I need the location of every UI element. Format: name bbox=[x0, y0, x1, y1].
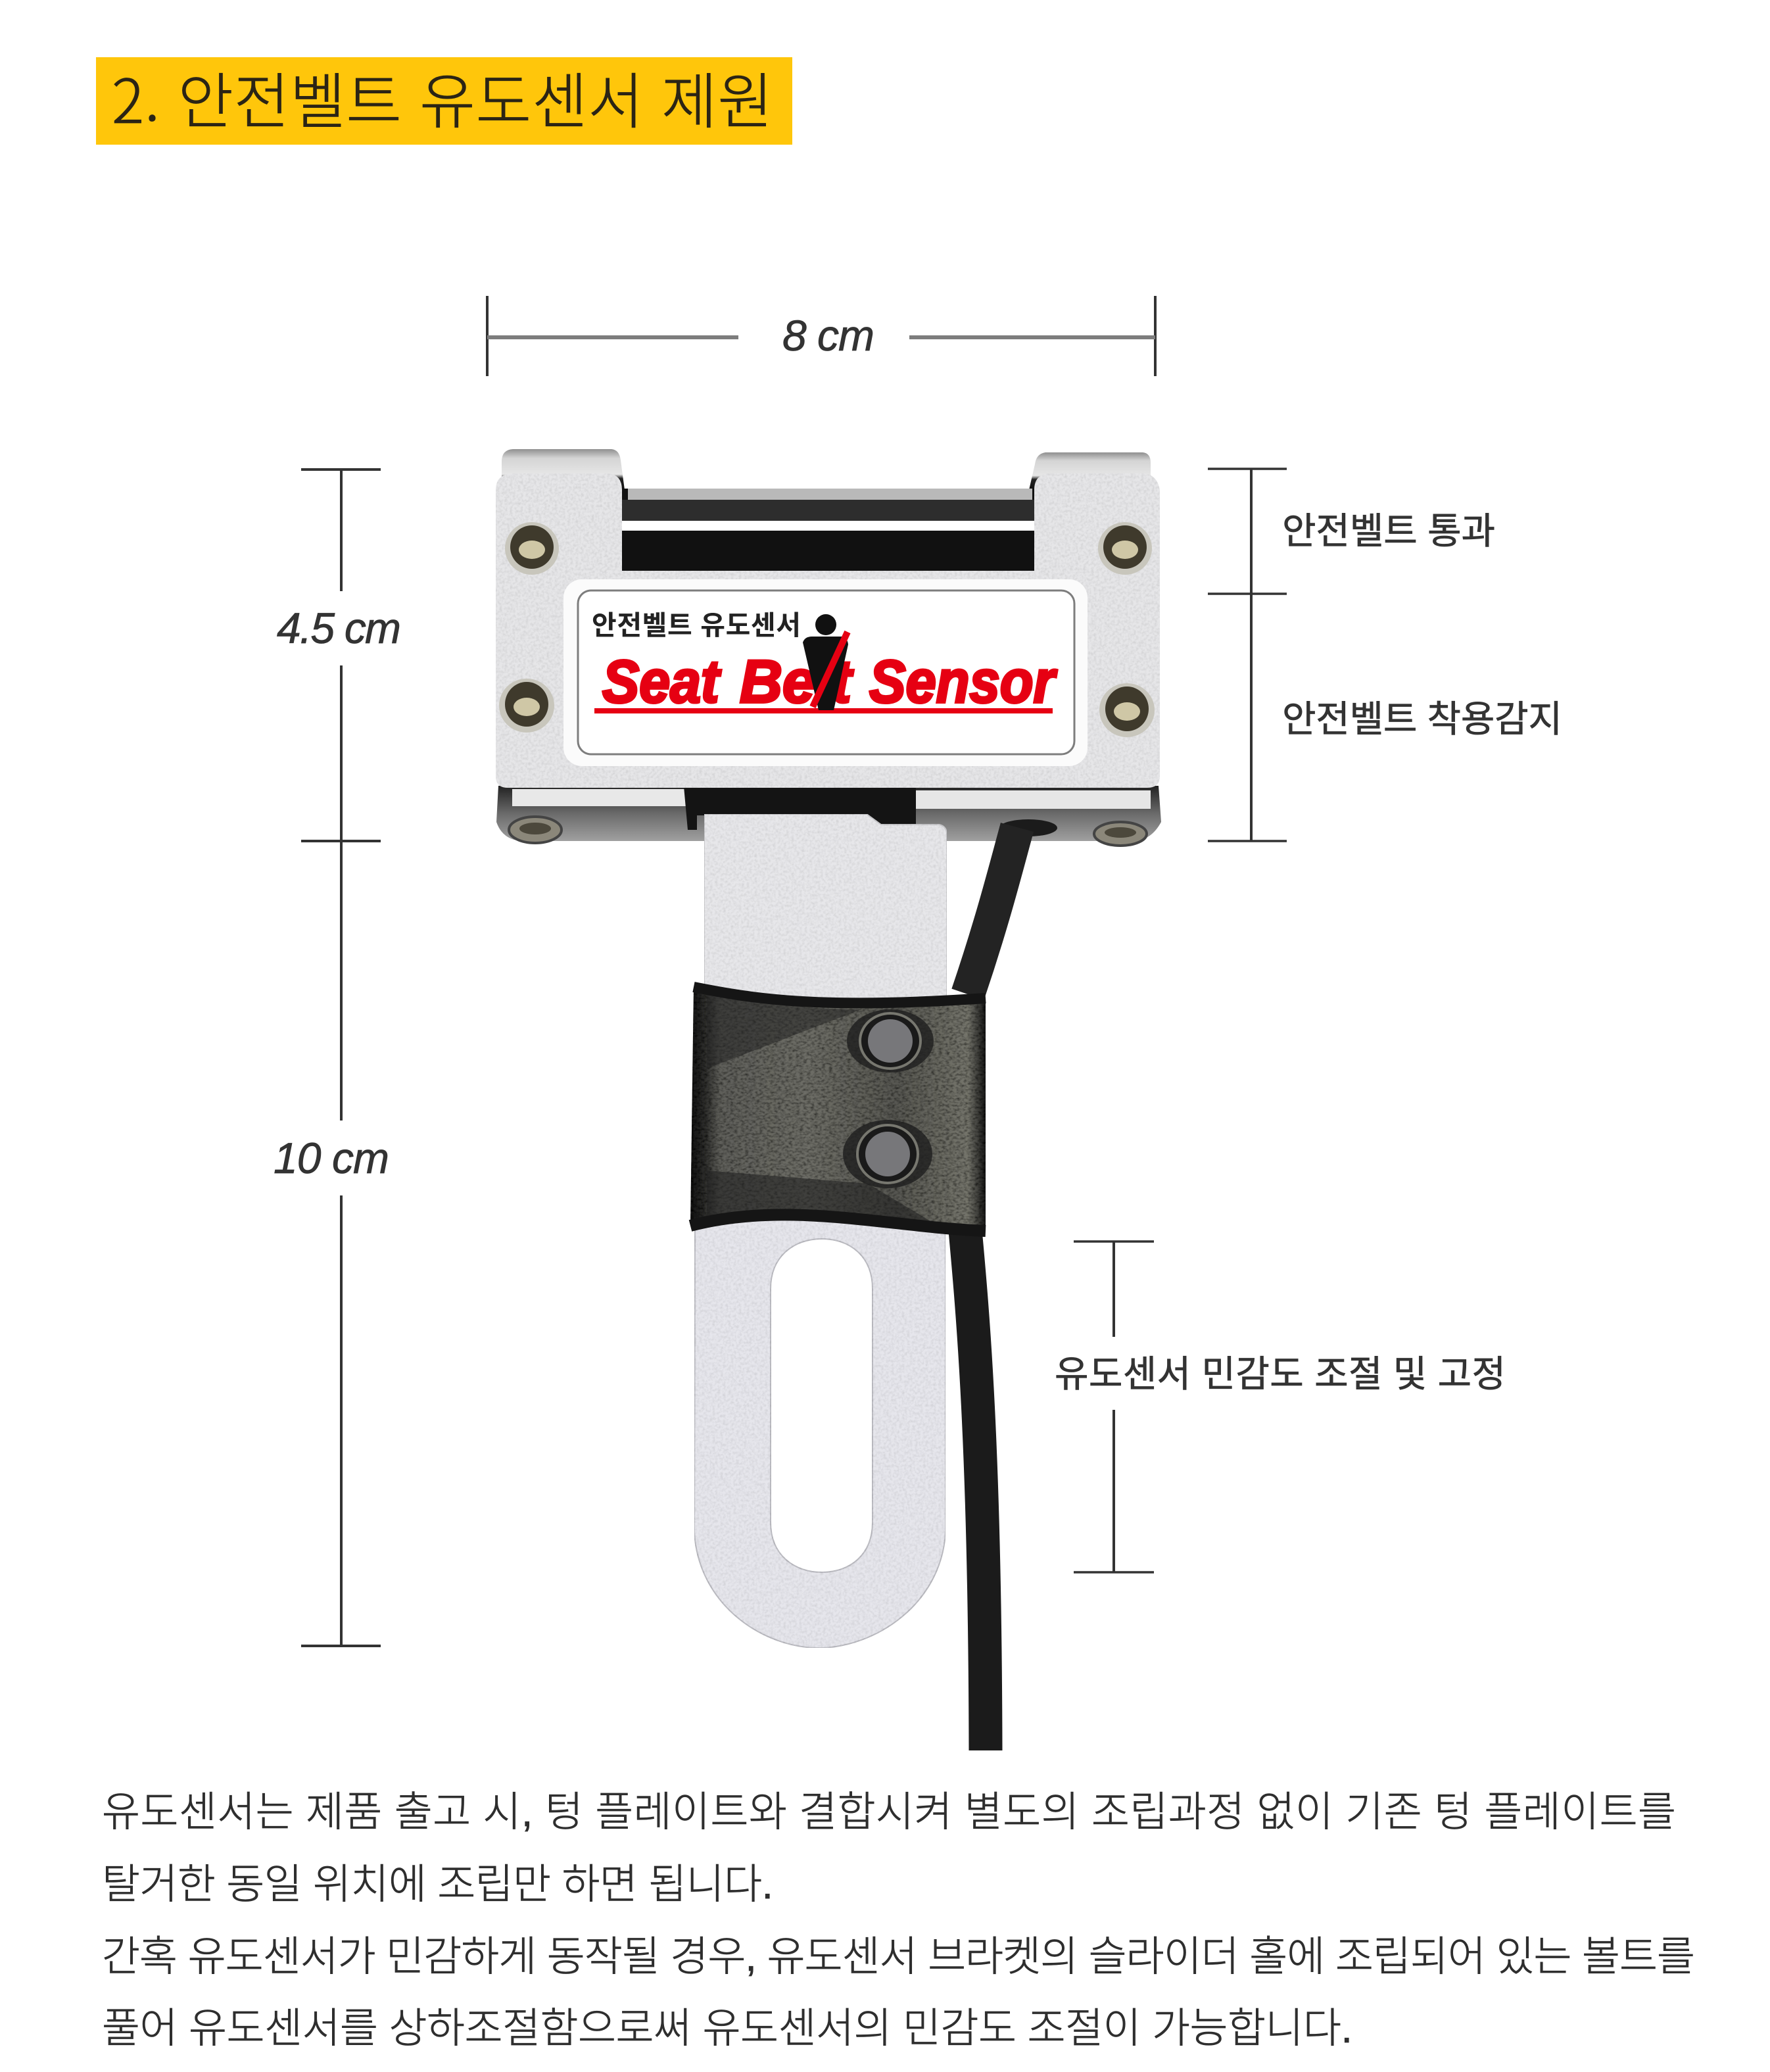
label english text: Sensor bbox=[869, 648, 1057, 715]
top lugs bbox=[502, 449, 625, 490]
title text: 2. 안전벨트 유도센서 제원 bbox=[112, 53, 773, 141]
lower strips bbox=[512, 789, 686, 806]
annotation: sensitivity adjustment bbox=[1055, 1241, 1506, 1572]
label english text: Belt bbox=[740, 648, 853, 715]
height dimension: 4.5 cm and 10 cm bbox=[274, 470, 401, 1646]
height dimension: 4.5 cm and 10 cm: 4.5 cm bbox=[277, 604, 401, 652]
bolts on sleeve bbox=[843, 1009, 934, 1188]
cable entry hole bbox=[999, 819, 1057, 836]
annotation: seat belt pass and detect bbox=[1208, 469, 1562, 841]
description text block: 간혹 유도센서가 민감하게 동작될 경우, 유도센서 브라켓의 슬라이더 홀에 조립되어 있는 볼트를 bbox=[102, 1934, 1695, 1980]
screws on plate bbox=[499, 522, 1155, 737]
annotation: sensitivity adjustment: 유도센서 민감도 조절 및 고정 bbox=[1055, 1353, 1506, 1395]
title banner bbox=[96, 53, 792, 145]
belt channel bbox=[615, 489, 1042, 574]
heat shrink sleeve bbox=[690, 987, 986, 1231]
description text block: 풀어 유도센서를 상하조절함으로써 유도센서의 민감도 조절이 가능합니다. bbox=[102, 2006, 1352, 2052]
description text block: 탈거한 동일 위치에 조립만 하면 됩니다. bbox=[102, 1862, 773, 1908]
label korean text: 안전벨트 유도센서 bbox=[592, 610, 801, 640]
housing plate bbox=[496, 473, 1160, 788]
seat belt figure icon bbox=[803, 614, 848, 710]
description text block: 유도센서는 제품 출고 시, 텅 플레이트와 결합시켜 별도의 조립과정 없이 기존 텅 플레이트를 bbox=[102, 1789, 1676, 1835]
label english text: Seat bbox=[602, 648, 721, 715]
lower cable bbox=[965, 1223, 986, 1750]
sensor bracket plate lower with slot bbox=[694, 1217, 945, 1648]
width dimension: 8 cm bbox=[487, 296, 1155, 376]
sensor housing lower side bbox=[496, 786, 1161, 841]
product photo: seat belt sensor bbox=[496, 449, 1161, 1750]
product label bbox=[563, 579, 1088, 766]
sensor bracket plate upper bbox=[704, 814, 947, 1000]
label red underline bbox=[594, 708, 1053, 713]
height dimension: 4.5 cm and 10 cm: 10 cm bbox=[274, 1134, 389, 1182]
lower screws bbox=[509, 817, 1147, 846]
width dimension: 8 cm: 8 cm bbox=[782, 311, 874, 360]
label english text bbox=[602, 648, 1057, 715]
description text block bbox=[102, 1789, 1695, 2052]
annotation: seat belt pass and detect: 안전벨트 통과 bbox=[1282, 510, 1495, 552]
annotation: seat belt pass and detect: 안전벨트 착용감지 bbox=[1282, 698, 1562, 740]
upper cable bbox=[968, 827, 1017, 994]
